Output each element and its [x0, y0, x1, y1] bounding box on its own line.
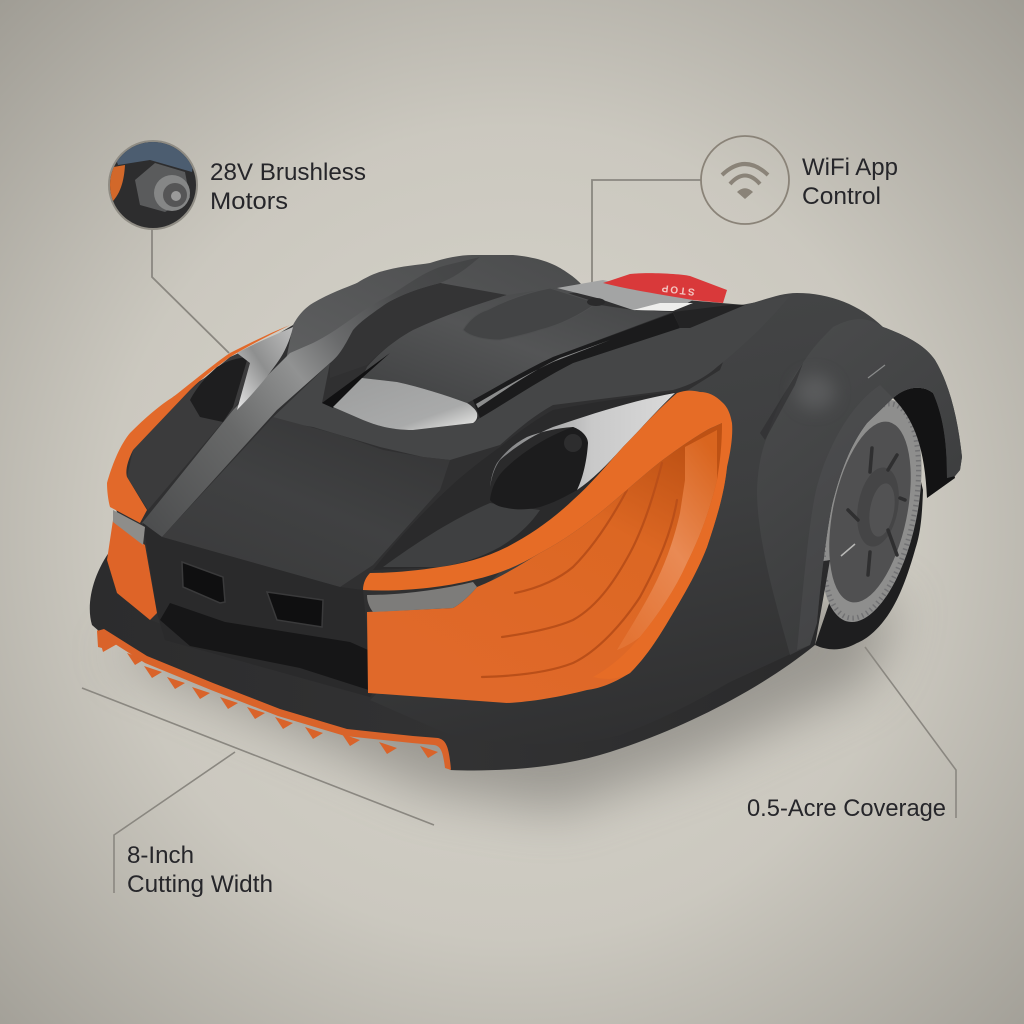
- fender highlights: [760, 363, 893, 650]
- front face: [143, 523, 375, 697]
- text: Control: [802, 183, 881, 210]
- headlight surround: [373, 392, 675, 570]
- left silver trim: [237, 327, 293, 410]
- left orange trim: [107, 325, 290, 523]
- orange panel ribs: [482, 463, 677, 677]
- button: [587, 298, 605, 306]
- left light strip: [113, 510, 145, 545]
- window: [333, 378, 477, 430]
- wifi label: WiFi App: [802, 154, 898, 181]
- coverage label: 0.5-Acre Coverage: [747, 795, 946, 822]
- robot mower: [90, 255, 962, 770]
- sensor right: [267, 592, 323, 627]
- stop button: STOP: [659, 282, 695, 297]
- centre band: [142, 257, 480, 537]
- raised top inset: [463, 288, 597, 340]
- orange channel: [617, 430, 717, 650]
- rear wheel: [803, 391, 939, 649]
- motors label: 28V Brushless: [210, 159, 366, 186]
- black slash: [473, 313, 680, 418]
- callout line: motors: [152, 229, 229, 353]
- rear fender: [757, 319, 962, 655]
- brow strip: [270, 296, 790, 460]
- lower headlight panel: [383, 503, 540, 567]
- top hump: [277, 255, 587, 405]
- wheel arch shadow: [893, 388, 955, 498]
- main body: [360, 293, 962, 744]
- callout line: wifi: [592, 180, 701, 296]
- top panel: [362, 288, 673, 403]
- rear panel of hump: [330, 283, 507, 378]
- orange side panel: [367, 423, 727, 703]
- cutter strip and teeth: [97, 629, 451, 770]
- callout line: cutting width: [82, 688, 434, 893]
- rear panel: [673, 305, 745, 328]
- text: Motors: [210, 188, 288, 215]
- silver control panel: [557, 280, 693, 311]
- wifi icon: [701, 136, 789, 224]
- base skirt: [90, 548, 830, 770]
- left side panel: [127, 330, 290, 510]
- text: Cutting Width: [127, 871, 273, 898]
- callout line: coverage: [865, 647, 956, 818]
- motor icon: [108, 141, 197, 229]
- left eye socket: [190, 357, 248, 422]
- headlight silver: [490, 393, 675, 490]
- hood: [162, 417, 450, 587]
- front light strip: [367, 582, 477, 612]
- stop button: [603, 273, 727, 303]
- black bumper recess: [160, 603, 375, 692]
- floor shadow: [110, 600, 900, 810]
- headlight socket: [490, 427, 588, 509]
- orange rim: [363, 391, 732, 679]
- black slit: [322, 353, 390, 408]
- cutting width label: 8-Inch: [127, 842, 194, 869]
- left lower orange: [107, 520, 157, 620]
- sensor left: [182, 562, 225, 603]
- upper body base: [108, 255, 745, 700]
